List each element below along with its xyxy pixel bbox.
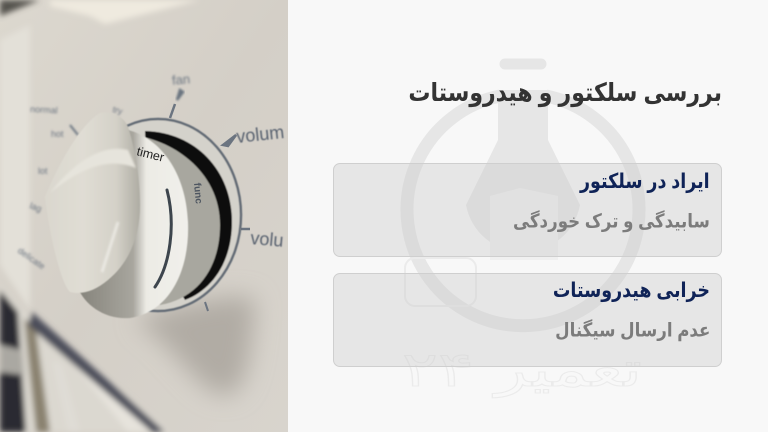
watermark small square <box>405 258 476 306</box>
watermark flask <box>466 90 580 252</box>
panel background <box>0 0 288 432</box>
knob grip <box>45 113 140 293</box>
dial labels: hot <box>51 129 64 139</box>
title: بررسی سلکتور و هیدروستات <box>408 78 722 107</box>
dial labels: lag <box>28 200 43 214</box>
watermark flask cap <box>505 58 541 70</box>
photo: washing machine selector knob <box>0 0 288 432</box>
label: volume top: volum <box>235 122 285 147</box>
knob indicator arc <box>155 190 171 287</box>
dial labels <box>16 71 285 271</box>
dial labels: normal <box>30 104 58 115</box>
heading: thermostat fault: خرابی هیدروستات <box>553 278 710 302</box>
knob skirt <box>78 130 188 318</box>
heading: selector fault: ایراد در سلکتور <box>580 170 710 192</box>
shadow below knob <box>135 297 255 395</box>
watermark: flask logo <box>400 58 646 398</box>
knob label: timer: timer <box>135 144 166 165</box>
dial ticks <box>70 90 250 311</box>
watermark wordmark: تعمیر ۲۴ <box>402 342 642 398</box>
dial labels: lot <box>38 166 48 176</box>
watermark circle <box>407 96 639 326</box>
lower dark machine edge <box>0 285 170 432</box>
panel: selector fault <box>333 163 722 257</box>
dial labels: try <box>111 104 124 117</box>
text: thermostat fault detail: عدم ارسال سیگنال <box>555 320 710 341</box>
knob label: func: func <box>191 182 204 205</box>
watermark house cutout <box>490 188 558 260</box>
label: volume right: volu <box>250 228 284 251</box>
text: selector fault detail: سابیدگی و ترک خوردگی <box>513 211 710 232</box>
panel: thermostat fault <box>333 273 722 367</box>
dial ring <box>75 119 241 311</box>
dial labels: delicate <box>16 245 47 271</box>
label: fan: fan <box>171 71 191 88</box>
